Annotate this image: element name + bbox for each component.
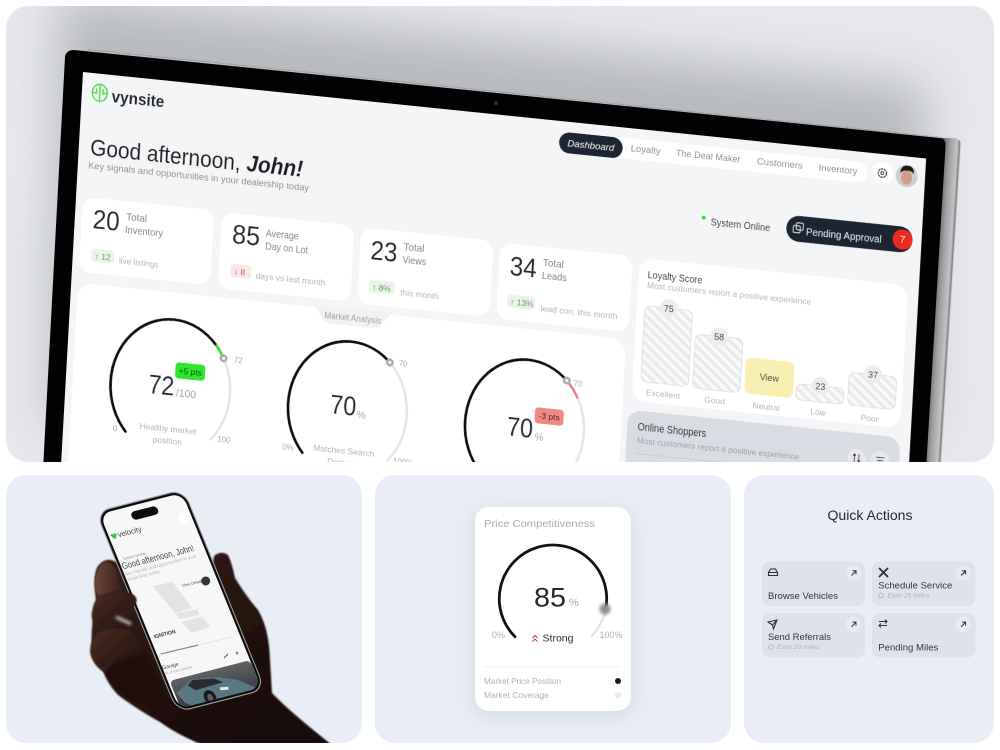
gauge: healthy market position: Healthy market xyxy=(139,421,197,437)
phone car photo xyxy=(170,660,265,717)
card: total views xyxy=(357,227,494,317)
pending approval button: 7 xyxy=(899,235,906,246)
gauge: third market score: % xyxy=(534,432,544,444)
nav bar: Inventory xyxy=(818,163,858,178)
gauge: healthy market position: 72 xyxy=(234,356,244,365)
legend: market price position: Market Price Position xyxy=(484,677,561,686)
system status xyxy=(702,216,770,232)
action: pending miles: Pending Miles xyxy=(878,642,939,653)
dynamic island xyxy=(131,506,158,520)
action: schedule service: Earn 25 miles xyxy=(887,593,930,600)
icon: brain xyxy=(92,84,108,102)
bar: neutral view xyxy=(743,357,795,414)
card: average day on lot: Day on Lot xyxy=(265,242,308,257)
bar: good 58 xyxy=(691,325,744,408)
card: total inventory: live listings xyxy=(119,255,159,269)
bar: poor 37: Poor xyxy=(860,412,879,424)
nav bar: The Deal Maker xyxy=(676,148,741,166)
phone view details: View Details xyxy=(181,578,204,588)
panel: online shoppers xyxy=(625,411,900,462)
action: browse vehicles: Browse Vehicles xyxy=(768,591,838,602)
gauge: healthy market position xyxy=(108,318,242,445)
gauge: matches search demand: 0% xyxy=(282,442,294,453)
front fingers xyxy=(90,562,176,712)
panel: loyalty score xyxy=(632,258,908,428)
bar: excellent 75: 75 xyxy=(664,303,674,314)
panel: online shoppers: Most customers report a positive experience xyxy=(637,435,799,462)
phone logo xyxy=(109,524,143,541)
nav: active tab: Dashboard xyxy=(567,138,615,154)
bar: neutral view: Neutral xyxy=(752,400,780,413)
gauge: third market score xyxy=(463,358,586,462)
gauge: price: 85 xyxy=(534,582,566,612)
monitor bezel xyxy=(43,50,946,470)
phone garage label xyxy=(161,658,193,676)
subheading: Key signals and opportunities in your dealership today xyxy=(88,161,310,194)
panel: quick actions xyxy=(744,475,994,743)
panel: market analysis xyxy=(68,284,625,462)
action: schedule service xyxy=(872,562,976,606)
card: total leads xyxy=(496,243,633,332)
gauge: price: 0% xyxy=(492,630,505,640)
action: send referrals xyxy=(762,613,865,658)
action: send referrals: Earn 20 miles xyxy=(777,644,820,651)
gauge: price: 100% xyxy=(599,630,623,640)
gauge: third market score: 70 xyxy=(506,411,534,444)
phone status: System Online xyxy=(122,551,146,561)
panel: price competitiveness background xyxy=(375,475,731,743)
gauge: healthy market position: /100 xyxy=(176,387,196,401)
settings button xyxy=(872,162,893,184)
legend: market coverage: Market Coverage xyxy=(484,691,550,700)
gauge: matches search demand: 100% xyxy=(393,457,414,468)
action: browse vehicles xyxy=(762,562,865,606)
phone garage label: Garage xyxy=(161,661,180,671)
bar: low 23 xyxy=(796,377,844,416)
gauge: matches search demand: Demand xyxy=(327,456,360,469)
hand behind phone xyxy=(92,553,332,745)
sort button xyxy=(848,449,866,462)
gauge: matches search demand: Matches Search xyxy=(313,443,375,459)
action: pending miles xyxy=(872,613,976,658)
gauge: price: % xyxy=(569,597,579,609)
legend: market coverage xyxy=(484,691,621,700)
nav bar: Loyalty xyxy=(630,143,661,157)
phone garage label: All of your vehicles xyxy=(164,665,193,676)
avatar xyxy=(895,164,918,188)
gauge: healthy market position: 0 xyxy=(113,424,118,434)
action: schedule service: Schedule Service xyxy=(878,581,952,592)
card: average day on lot: days vs last month xyxy=(256,270,326,287)
bar: excellent 75 xyxy=(640,297,693,402)
card: price competitiveness xyxy=(475,507,631,711)
gauge: matches search demand: 70 xyxy=(398,359,408,369)
phone action icons xyxy=(224,652,238,658)
panel: monitor hero xyxy=(6,6,994,462)
gauge: price xyxy=(492,545,623,640)
card: average day on lot: Average xyxy=(266,229,299,243)
quick actions title: Quick Actions xyxy=(828,508,913,523)
phone logo: velocity xyxy=(116,524,143,539)
bar: low 23: 23 xyxy=(815,381,826,392)
card: total leads: 34 xyxy=(509,251,538,284)
card: total inventory xyxy=(79,197,214,285)
card: total views: 23 xyxy=(370,235,398,268)
panel: loyalty score: Most customers report a positive experience xyxy=(647,280,812,307)
pending approval button: Pending Approval xyxy=(806,226,882,246)
panel: online shoppers: Online Shoppers xyxy=(637,421,707,440)
bar: poor 37: 37 xyxy=(868,369,878,380)
gauge: healthy market position: position xyxy=(153,434,182,447)
badge: -3 pts: -3 pts xyxy=(538,410,560,423)
dashboard screen xyxy=(61,72,926,462)
gauge: healthy market position: 100 xyxy=(217,435,231,445)
phone progress bar xyxy=(161,637,233,654)
bar: good 58: 58 xyxy=(714,331,724,342)
legend: market price position xyxy=(484,677,621,686)
logo: vynsite xyxy=(111,88,165,111)
card: total views: ↑ 8% xyxy=(372,282,391,294)
phone greeting: Good afternoon, John! xyxy=(120,543,196,571)
panel: loyalty score: Loyalty Score xyxy=(647,269,703,287)
system status: System Online xyxy=(710,217,771,235)
card: total inventory: 20 xyxy=(92,204,120,237)
bar: poor 37 xyxy=(847,366,897,422)
card: price competitiveness: Price Competitiveness xyxy=(484,518,595,530)
card: total inventory: Inventory xyxy=(125,225,163,240)
nav bar xyxy=(558,131,868,184)
card: total views: Total xyxy=(403,242,425,255)
menu button xyxy=(176,512,191,525)
phone view details xyxy=(181,576,210,588)
logo xyxy=(91,83,164,108)
gauge: matches search demand: 70 xyxy=(330,389,357,422)
card: total inventory: ↑ 12 xyxy=(94,251,111,262)
card: total views: this month xyxy=(400,287,439,301)
status: strong: Strong xyxy=(542,633,574,645)
phone ignition label: IGNITION xyxy=(153,629,177,640)
phone subtext: dealership today xyxy=(126,569,161,582)
bar: neutral view: View xyxy=(759,372,780,384)
gauge: healthy market position: 72 xyxy=(148,369,175,402)
finger highlight xyxy=(116,617,131,624)
webcam xyxy=(494,101,498,105)
phone subtext: Key signals and opportunities in your xyxy=(124,553,198,577)
bar: good 58: Good xyxy=(704,394,726,406)
card: total inventory: Total xyxy=(126,212,147,225)
card: total views: Views xyxy=(402,255,427,269)
phone xyxy=(96,490,267,718)
nav: active tab xyxy=(558,131,623,159)
card: average day on lot: ↓ 8 xyxy=(234,266,246,277)
badge: +5 pts: +5 pts xyxy=(178,365,202,378)
action: send referrals: Send Referrals xyxy=(768,632,831,643)
card: total leads: Leads xyxy=(542,271,567,285)
gauge: matches search demand: % xyxy=(356,410,366,422)
card: total leads: lead con. this month xyxy=(541,303,618,321)
card: total leads: Total xyxy=(543,258,564,271)
heading: Good afternoon, John! xyxy=(90,134,304,182)
card: average day on lot: 85 xyxy=(231,219,261,252)
monitor side edge xyxy=(925,138,961,470)
panel: phone in hand xyxy=(6,475,362,745)
market analysis tab: Market Analysis xyxy=(324,310,382,327)
bar: low 23: Low xyxy=(810,406,827,418)
phone hero blocks xyxy=(153,582,211,633)
bar: excellent 75: Excellent xyxy=(646,387,681,401)
card: average day on lot xyxy=(218,212,354,302)
nav bar: Customers xyxy=(757,156,803,172)
filter button xyxy=(871,451,889,462)
gauge: matches search demand xyxy=(282,340,412,462)
pending approval button xyxy=(786,215,913,254)
card: total leads: ↑ 13% xyxy=(510,296,534,309)
gauge: third market score: 70 xyxy=(573,379,583,389)
